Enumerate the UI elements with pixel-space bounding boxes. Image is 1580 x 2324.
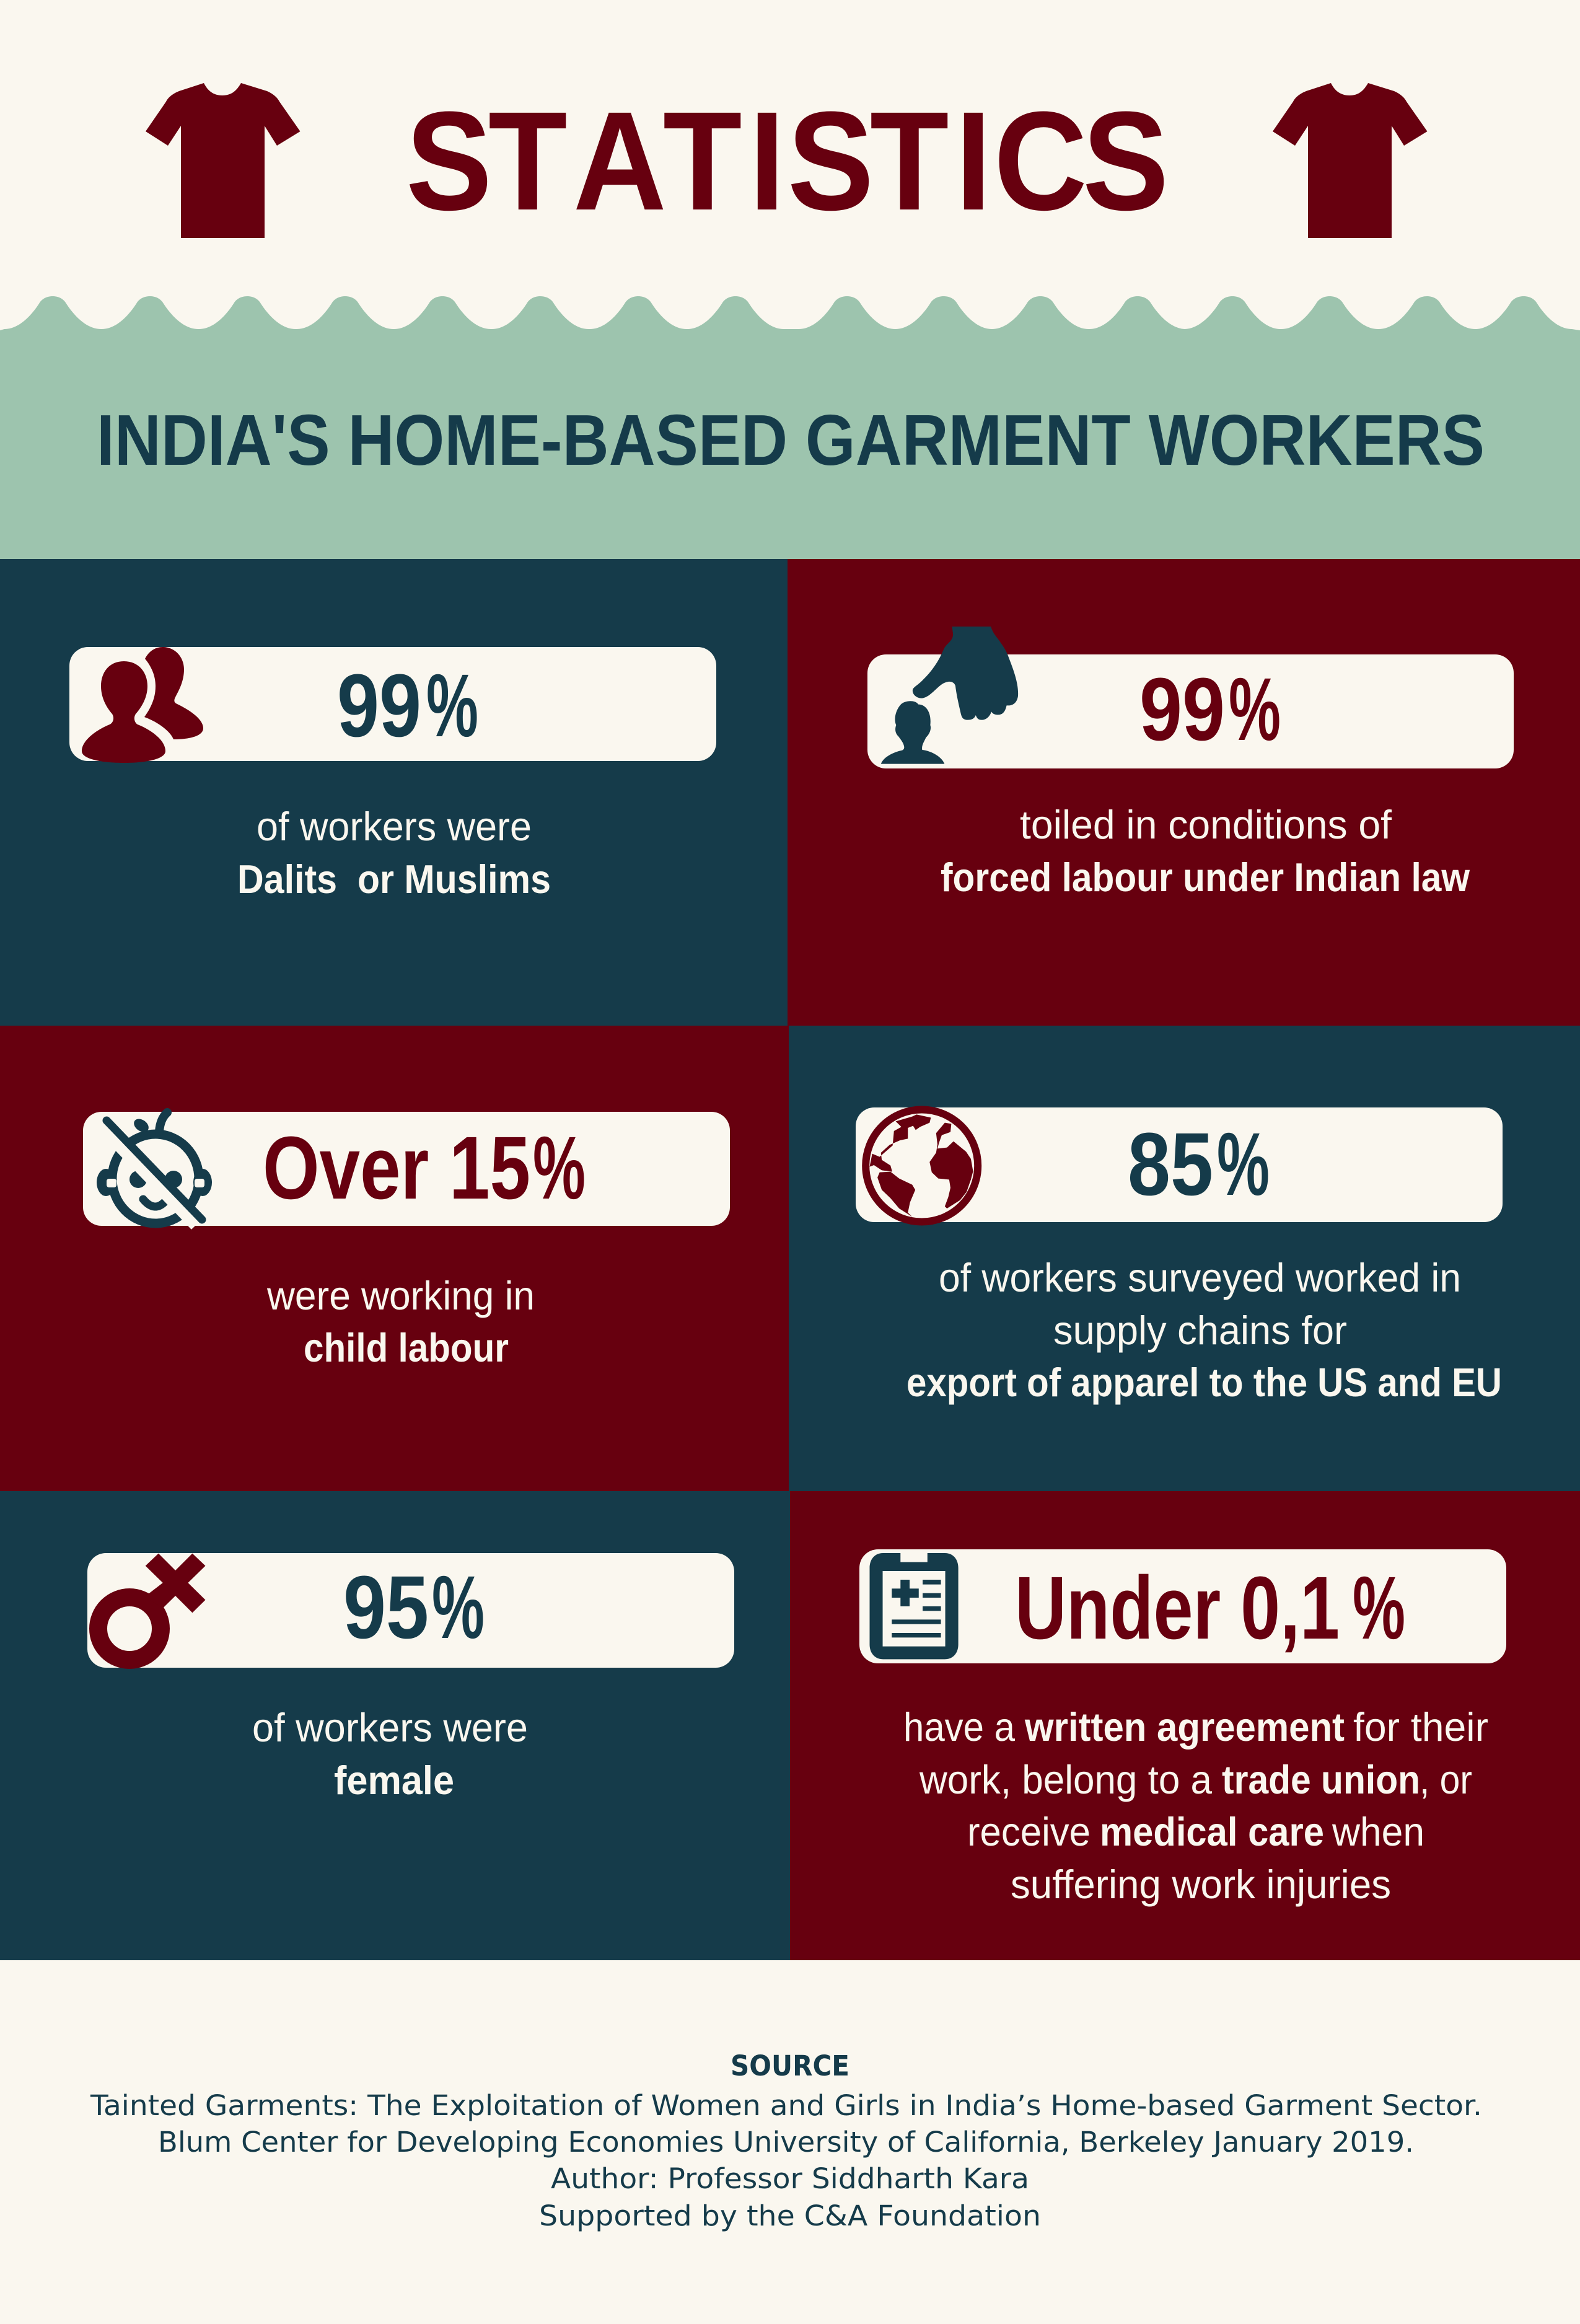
panel: export supply chains	[789, 1026, 1580, 1492]
description: medical care	[1100, 1809, 1324, 1854]
description	[903, 1704, 1488, 1907]
description: toiled in conditions of	[1020, 802, 1392, 847]
icon: right t-shirt	[1273, 83, 1428, 238]
stat number: Over 15	[263, 1118, 530, 1218]
source citation: Supported by the C&A Foundation	[539, 2199, 1041, 2232]
stat number: %	[1353, 1558, 1405, 1658]
source footer	[90, 2049, 1482, 2232]
description: supply chains for	[1053, 1308, 1347, 1353]
banner: scalloped green band with subtitle	[0, 296, 1580, 560]
stat pill	[859, 1549, 1506, 1663]
icon: two people	[82, 647, 203, 763]
description: have a	[903, 1704, 1016, 1750]
stat number: 95	[343, 1557, 429, 1657]
description	[941, 802, 1470, 900]
description	[237, 804, 551, 902]
description	[906, 1255, 1502, 1405]
stat number: 85	[1128, 1114, 1213, 1214]
stat pill	[83, 1112, 730, 1226]
description: suffering work injuries	[1011, 1862, 1391, 1907]
scalloped band	[0, 296, 1580, 560]
description: of workers were	[252, 1705, 528, 1750]
description: forced labour under Indian law	[941, 855, 1470, 900]
stat number: 99	[1139, 659, 1225, 759]
panel: child labour	[0, 1026, 789, 1492]
description: for their	[1353, 1704, 1488, 1750]
description	[266, 1273, 535, 1370]
header: title with t-shirt icons	[146, 83, 1428, 240]
source citation: Blum Center for Developing Economies University of California, Berkeley January 2019.	[158, 2126, 1414, 2159]
description: work, belong to a	[919, 1757, 1213, 1802]
description: female	[334, 1758, 454, 1803]
panel: agreements, unions, medical care	[790, 1491, 1580, 1960]
icon: crossed-out baby face	[97, 1112, 212, 1226]
icon: globe	[866, 1109, 978, 1222]
stat number: Under 0,1	[1015, 1558, 1340, 1658]
description: Dalits or Muslims	[237, 856, 551, 902]
description: when	[1332, 1809, 1424, 1854]
stat number: 99	[337, 656, 421, 755]
description: of workers surveyed worked in	[939, 1255, 1461, 1300]
source heading: SOURCE	[731, 2049, 849, 2082]
stat number	[1128, 1114, 1270, 1214]
description: , or	[1420, 1757, 1472, 1802]
description: trade union	[1222, 1757, 1420, 1802]
description: written agreement	[1024, 1704, 1345, 1750]
stat pill	[69, 647, 716, 761]
stat number: %	[432, 1557, 485, 1657]
stat number: %	[533, 1118, 586, 1218]
stat number: %	[426, 656, 478, 755]
description: child labour	[304, 1325, 509, 1370]
panel: female workers	[0, 1491, 791, 1960]
stat pill	[856, 1107, 1503, 1222]
stat number: %	[1217, 1114, 1270, 1214]
icon: left t-shirt	[146, 83, 300, 238]
description: export of apparel to the US and EU	[906, 1360, 1502, 1405]
title: STATISTICS	[406, 83, 1169, 240]
icon: hand pointing at person	[881, 627, 1018, 764]
description: of workers were	[257, 804, 532, 849]
panel: forced labour	[788, 559, 1580, 1026]
stat pill	[867, 654, 1514, 768]
description: receive	[967, 1809, 1091, 1854]
source citation: Tainted Garments: The Exploitation of Women and Girls in India’s Home-based Garment Sector.	[90, 2089, 1482, 2122]
icon: female symbol	[98, 1554, 205, 1660]
icon: medical clipboard	[869, 1553, 959, 1659]
source citation: Author: Professor Siddharth Kara	[551, 2162, 1029, 2195]
stat pill	[87, 1553, 734, 1668]
panel: Dalits or Muslims	[0, 559, 788, 1026]
source citation	[90, 2089, 1482, 2232]
stat number: %	[1229, 659, 1281, 759]
description: were working in	[266, 1273, 535, 1318]
description	[252, 1705, 528, 1803]
